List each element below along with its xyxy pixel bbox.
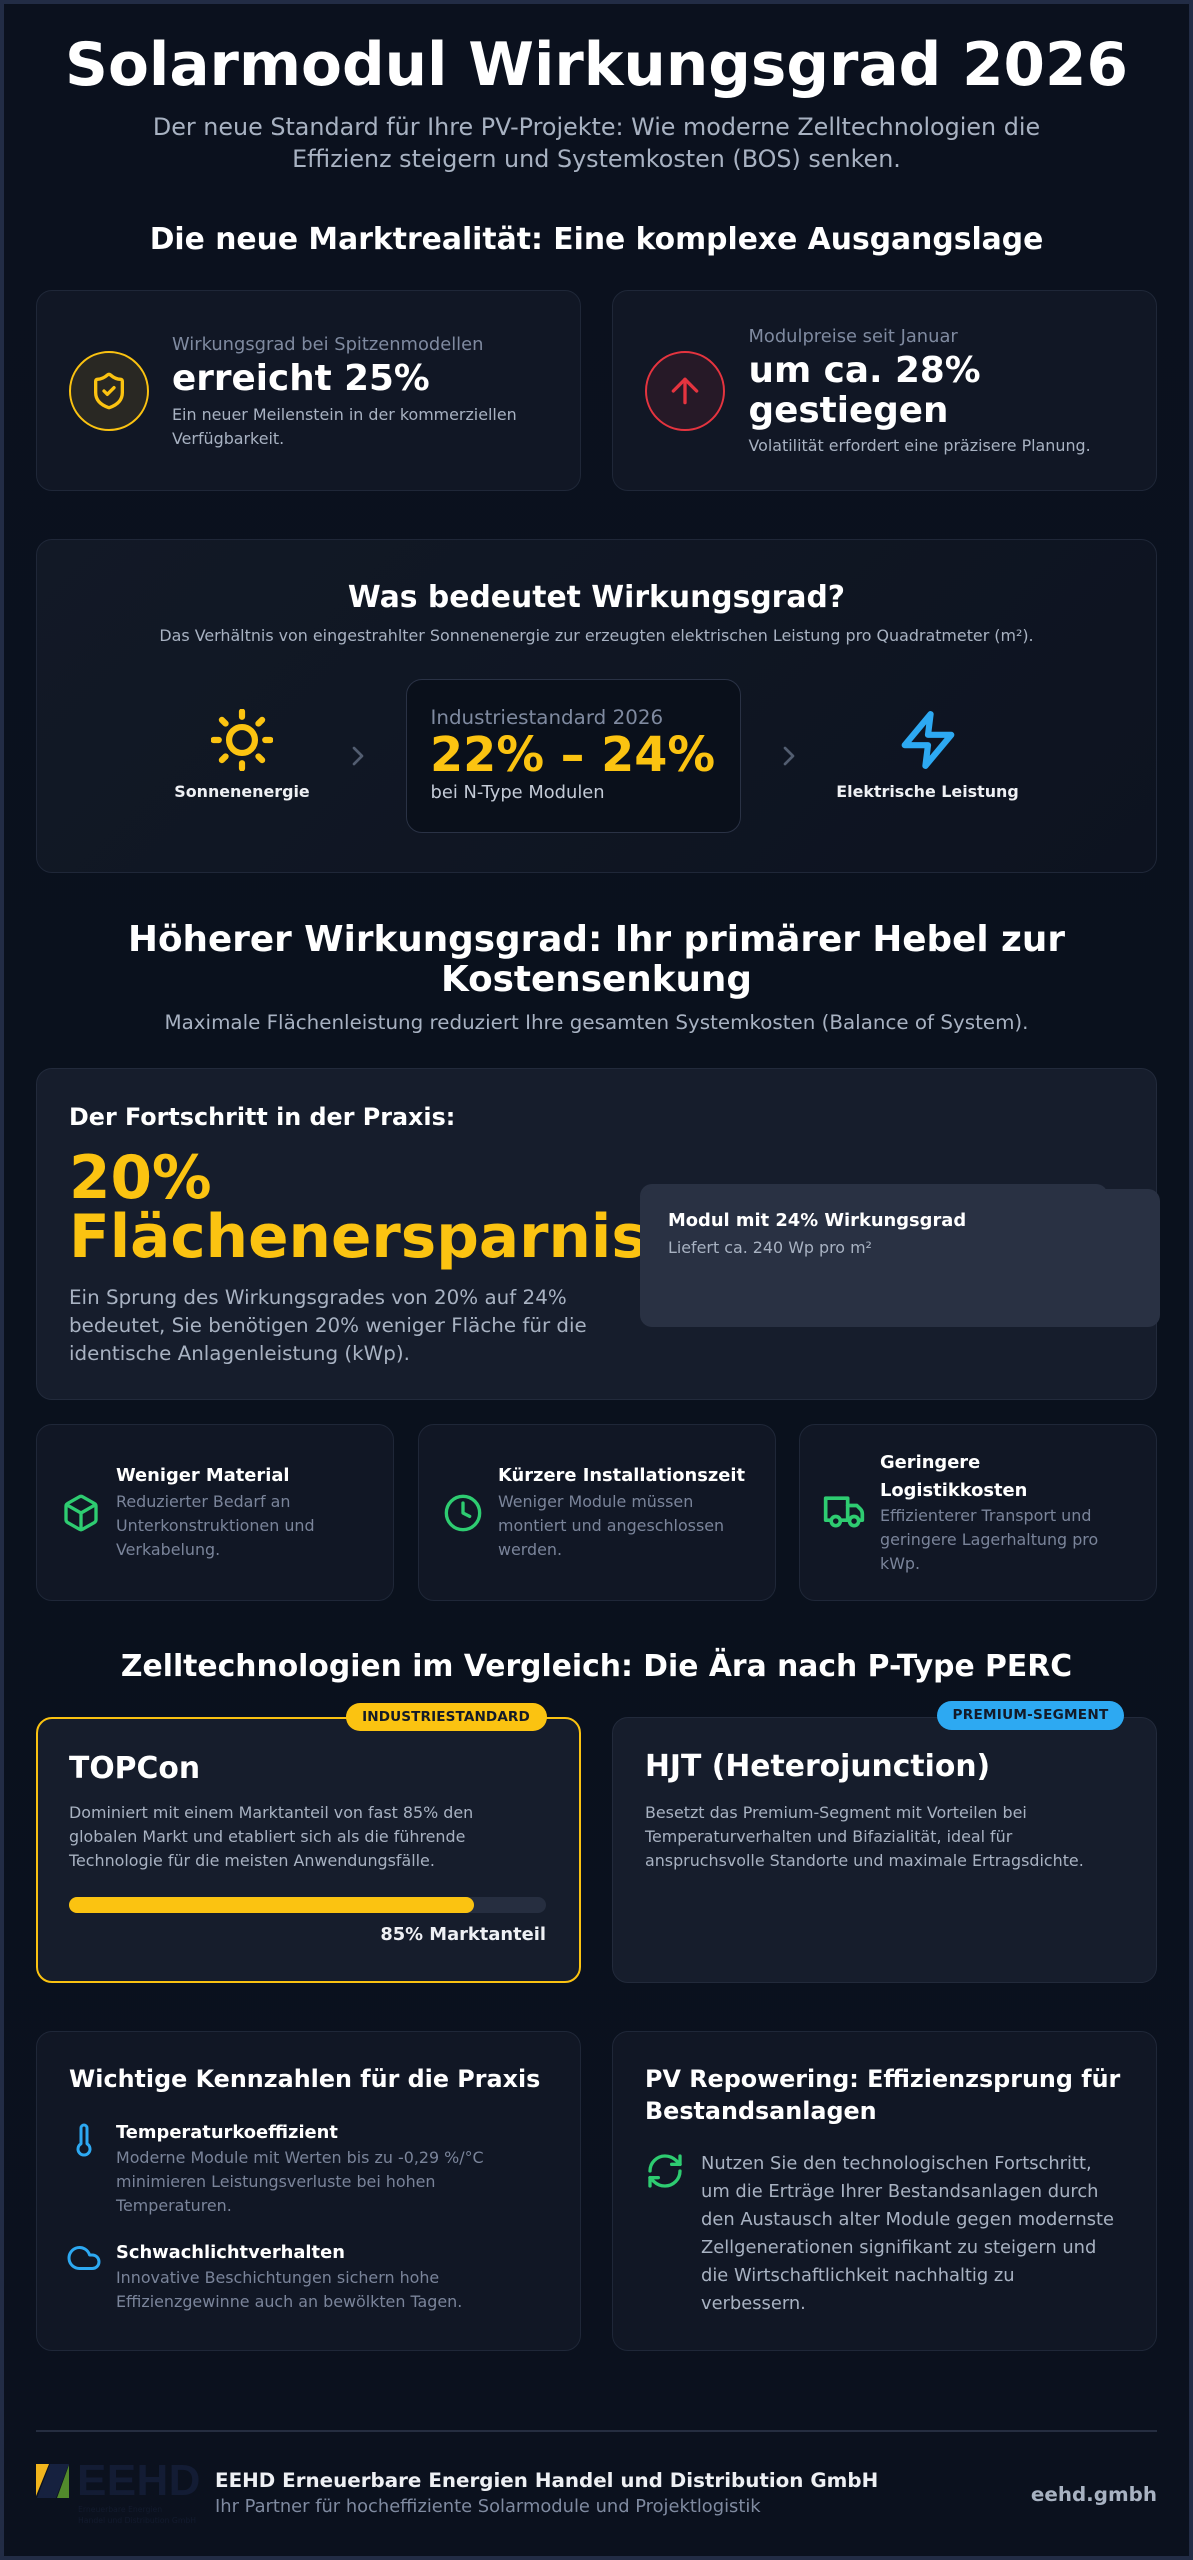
panel: Weniger Material [36, 1424, 394, 1601]
icon: box [64, 1494, 98, 1532]
heading: Marktrealität: Die neue Marktrealität: Eine komplexe Ausgangslage [150, 222, 1043, 257]
panel: HJT [612, 1717, 1157, 1983]
description: Effizienterer Transport und [880, 1506, 1091, 1525]
heading: Bestandsanlagen [645, 2097, 877, 2125]
heading: Was bedeutet Wirkungsgrad? [348, 580, 845, 614]
label: Sonnenenergie: Sonnenenergie [174, 782, 310, 801]
item title: Temperaturkoeffizient [116, 2122, 338, 2143]
module title: Modul mit 24% Wirkungsgrad [668, 1210, 966, 1231]
value [748, 350, 981, 431]
big stat: 20% [69, 1144, 212, 1213]
value: 22% – 24% [430, 728, 715, 783]
value: erreicht 25% [172, 358, 430, 399]
description: kWp. [880, 1554, 920, 1573]
icon: shield check [69, 351, 149, 431]
logo wordmark: EEHD [77, 2456, 201, 2505]
value: um ca. 28% [748, 350, 981, 391]
bar fill [69, 1897, 474, 1913]
module note: Liefert ca. 240 Wp pro m² [668, 1238, 872, 1257]
badge [346, 1703, 546, 1731]
label: Modulpreise seit Januar [748, 326, 958, 347]
description: Besetzt das Premium-Segment mit Vorteilen bei [645, 1803, 1027, 1822]
description: Ein neuer Meilenstein in der kommerziellen [172, 405, 517, 424]
item description: minimieren Leistungsverluste bei hohen [116, 2172, 436, 2191]
label: Elektrische Leistung: Elektrische Leistung [836, 782, 1019, 801]
label: Wirkungsgrad bei Spitzenmodellen [172, 334, 483, 355]
item description: Temperaturen. [116, 2196, 232, 2215]
logo mark [36, 2464, 69, 2498]
logo tagline: Erneuerbare Energien [78, 2505, 162, 2514]
heading: Höherer Wirkungsgrad: Kostensenkung [441, 959, 752, 1000]
label: Industriestandard 2026 [430, 706, 663, 729]
badge [937, 1701, 1124, 1730]
big stat: Flächenersparnis [69, 1203, 647, 1272]
item description: Innovative Beschichtungen sichern hohe [116, 2268, 439, 2287]
description [644, 1803, 1084, 1870]
title: HJT (Heterojunction) [645, 1749, 990, 1784]
item description: Effizienzgewinne auch an bewölkten Tagen. [116, 2292, 462, 2311]
panel: TOPCon [36, 1717, 581, 1983]
panel: Geringere Logistikkosten [799, 1424, 1157, 1601]
description: den Austausch alter Module gegen modernste [701, 2209, 1114, 2230]
panel: Wirkungsgrad bei Spitzenmodellen [36, 290, 581, 491]
big stat [69, 1144, 647, 1272]
description: Temperaturverhalten und Bifazialität, ideal für [645, 1827, 1012, 1846]
icon: cloud [68, 2246, 100, 2270]
description [69, 1286, 587, 1365]
description [880, 1506, 1098, 1573]
title: Solarmodul Wirkungsgrad 2026 [65, 31, 1128, 100]
title: Logistikkosten [880, 1480, 1027, 1500]
heading [645, 2065, 1120, 2125]
badge: PREMIUM-SEGMENT [953, 1707, 1108, 1723]
description: Nutzen Sie den technologischen Fortschritt, [701, 2153, 1092, 2174]
description: um die Erträge Ihrer Bestandsanlagen durch [701, 2181, 1099, 2202]
description: Unterkonstruktionen und [116, 1516, 315, 1535]
description: Dominiert mit einem Marktanteil von fast 85% den [69, 1803, 473, 1822]
bar label: 85% Marktanteil [380, 1924, 546, 1945]
box: Industriestandard [406, 679, 741, 833]
logo [36, 2456, 201, 2525]
company tagline: Ihr Partner für hocheffiziente Solarmodule und Projektlogistik [215, 2496, 761, 2517]
heading: PV Repowering: Effizienzsprung für [645, 2065, 1120, 2093]
description: Technologie für die meisten Anwendungsfälle. [69, 1851, 435, 1870]
item description: Moderne Module mit Werten bis zu -0,29 %/°C [116, 2148, 484, 2167]
item description [116, 2268, 462, 2311]
icon: arrow up [645, 351, 725, 431]
description: montiert und angeschlossen [498, 1516, 724, 1535]
title: Weniger Material [116, 1465, 290, 1486]
subtitle: Der neue Standard für Ihre PV-Projekte: Wie moderne Zelltechnologien die [153, 113, 1040, 141]
logo tagline [78, 2505, 196, 2525]
description: Weniger Module müssen [498, 1492, 693, 1511]
description [498, 1492, 724, 1559]
description [172, 405, 517, 448]
website: eehd.gmbh [1031, 2483, 1157, 2506]
front module [640, 1189, 1160, 1327]
description: Verfügbarkeit. [172, 429, 284, 448]
description: globalen Markt und etabliert sich als die führende [69, 1827, 465, 1846]
item description [116, 2148, 484, 2215]
description: geringere Lagerhaltung pro [880, 1530, 1098, 1549]
description: Reduzierter Bedarf an [116, 1492, 290, 1511]
company name: EEHD Erneuerbare Energien Handel und Distribution GmbH [215, 2469, 878, 2492]
panel: PV Repowering [612, 2031, 1157, 2351]
description: bedeutet, Sie benötigen 20% weniger Fläche für die [69, 1314, 587, 1337]
subtitle [153, 113, 1040, 173]
description: identische Anlagenleistung (kWp). [69, 1342, 410, 1365]
heading: Der Fortschritt in der Praxis: [69, 1103, 455, 1131]
icon: refresh [648, 2154, 682, 2188]
description: Ein Sprung des Wirkungsgrades von 20% auf 24% [69, 1286, 567, 1309]
title: TOPCon [69, 1751, 200, 1786]
description [68, 1803, 473, 1870]
panel: Kennzahlen [36, 2031, 581, 2351]
subheading: Maximale Flächenleistung reduziert Ihre gesamten Systemkosten (Balance of System). [164, 1011, 1028, 1034]
header [65, 31, 1128, 173]
description: Das Verhältnis von eingestrahlter Sonnenenergie zur erzeugten elektrischen Leistung pro Quadratmeter (m²). [159, 626, 1034, 644]
description: die Wirtschaftlichkeit nachhaltig zu [701, 2265, 1015, 2286]
heading: Zelltechnologien: Zelltechnologien im Vergleich: Die Ära nach P-Type PERC [121, 1649, 1072, 1684]
value: gestiegen [748, 390, 948, 431]
heading: Höherer Wirkungsgrad [128, 919, 1065, 1000]
icon: sun [211, 709, 273, 771]
footer [36, 2430, 1157, 2532]
icon: truck [824, 1496, 864, 1528]
panel: Modulpreise [612, 290, 1157, 491]
back module [640, 1184, 1108, 1284]
badge: INDUSTRIESTANDARD [362, 1709, 530, 1725]
description: Zellgenerationen signifikant zu steigern und [701, 2237, 1096, 2258]
description: verbessern. [701, 2293, 806, 2314]
arrow [352, 746, 364, 766]
description [116, 1492, 315, 1559]
subtitle: Effizienz steigern und Systemkosten (BOS) senken. [292, 145, 901, 173]
logo tagline: Handel und Distribution GmbH [78, 2516, 196, 2525]
title: Geringere [880, 1452, 980, 1472]
module comparison box [640, 1184, 1160, 1327]
panel: Kürzere Installationszeit [418, 1424, 776, 1601]
item title: Schwachlichtverhalten [116, 2242, 345, 2262]
description: Verkabelung. [116, 1540, 220, 1559]
description [701, 2153, 1114, 2314]
heading: Höherer Wirkungsgrad: Höherer Wirkungsgrad: Ihr primärer Hebel zur [128, 919, 1065, 960]
icon: lightning [902, 711, 954, 769]
panel: Fortschritt in der Praxis [36, 1068, 1157, 1400]
description: Volatilität erfordert eine präzisere Planung. [748, 436, 1091, 455]
note: bei N-Type Modulen [430, 782, 605, 803]
progress bar [69, 1897, 546, 1913]
heading: Wichtige Kennzahlen für die Praxis [69, 2065, 540, 2093]
icon: clock [444, 1494, 482, 1532]
description: anspruchsvolle Standorte und maximale Ertragsdichte. [645, 1851, 1084, 1870]
icon: thermometer [76, 2124, 92, 2156]
title [880, 1452, 1027, 1500]
description: werden. [498, 1540, 562, 1559]
arrow [784, 746, 794, 766]
panel: Was bedeutet Wirkungsgrad [36, 539, 1157, 873]
title: Kürzere Installationszeit [498, 1465, 745, 1486]
